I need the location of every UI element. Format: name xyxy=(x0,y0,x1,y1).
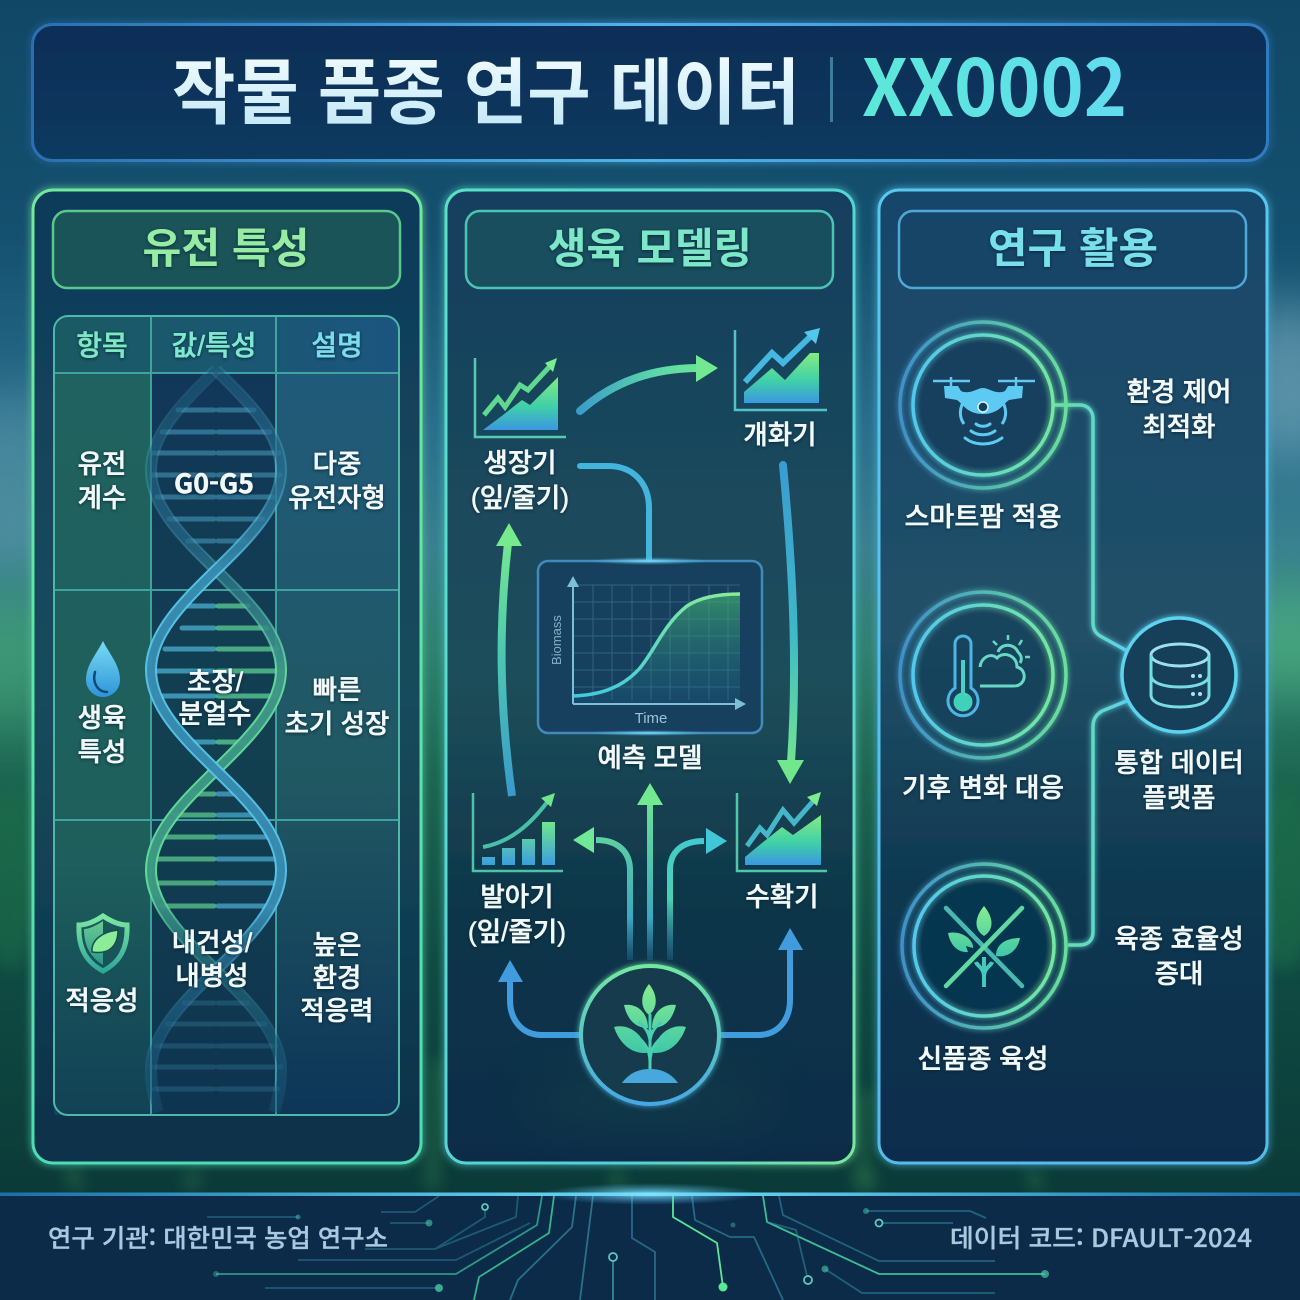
panel heading: growth modeling: 생육 모델링 xyxy=(548,225,752,272)
title banner xyxy=(32,24,1268,160)
dataset code: XX0002 xyxy=(862,27,1127,139)
label: data platform: 통합 데이터 xyxy=(1114,748,1244,778)
arrow: seed to harvest chart xyxy=(670,828,727,960)
note: environment control: 최적화 xyxy=(1142,412,1216,442)
row 3 description: 높은 xyxy=(313,930,361,960)
connector: breeding to data platform xyxy=(1068,700,1129,945)
stage label: sprouting: (잎/줄기) xyxy=(468,917,566,947)
arrow: seed to model xyxy=(637,783,663,960)
panel: genetic traits xyxy=(33,190,421,1163)
stage label: flowering: 개화기 xyxy=(743,420,817,450)
row 1 description: 유전자형 xyxy=(288,483,386,513)
label: new variety: 신품종 육성 xyxy=(918,1044,1048,1074)
stage label: harvest: 수확기 xyxy=(745,882,819,912)
panel heading: genetic traits xyxy=(53,211,400,288)
prediction model chart xyxy=(538,557,762,736)
table header: value: 값/특성 xyxy=(171,330,257,361)
row 2 description: 빠른 xyxy=(313,675,361,705)
arrow: vegetative label to model xyxy=(580,466,649,560)
stage label: vegetative: 생장기 xyxy=(483,448,557,478)
row 1 value: G0-G5 xyxy=(174,462,254,501)
chart icon: flowering stage xyxy=(735,328,827,410)
connector: smart farm to data platform xyxy=(1053,405,1129,652)
row 3 label: 적응성 xyxy=(65,986,139,1016)
arrow: sprouting to vegetative xyxy=(496,523,522,796)
row 3 value: 내건성/ xyxy=(172,928,252,958)
row 2 label: 특성 xyxy=(78,737,126,767)
connector: climate to data platform xyxy=(1066,673,1123,677)
circuit board traces xyxy=(207,1196,1045,1300)
stage label: sprouting: 발아기 xyxy=(480,882,554,912)
arrow: flowering to harvest xyxy=(777,465,804,784)
icon: water drop xyxy=(86,641,120,697)
trait table xyxy=(54,316,399,1115)
panel heading: genetic traits: 유전 특성 xyxy=(142,225,310,272)
chart icon: vegetative stage xyxy=(475,358,566,437)
icon: climate thermometer and cloud xyxy=(900,592,1066,758)
icon: smart farm drone xyxy=(900,322,1066,488)
note: breeding efficiency: 증대 xyxy=(1155,959,1203,989)
axis label: biomass: Biomass xyxy=(549,615,564,665)
arrow: seed to harvest label xyxy=(719,928,803,1035)
row 1 label: 유전 xyxy=(78,449,126,479)
arrow: seed to sprouting label xyxy=(498,960,581,1035)
note: breeding efficiency: 육종 효율성 xyxy=(1114,924,1244,954)
label: climate response: 기후 변화 대응 xyxy=(902,773,1064,803)
DNA double helix xyxy=(151,370,281,1112)
panel heading: growth modeling xyxy=(466,211,833,288)
row 2 description: 초기 성장 xyxy=(285,709,389,739)
label: data platform: 플랫폼 xyxy=(1142,783,1216,813)
row 2 label: 생육 xyxy=(78,703,126,733)
row 3 value: 내병성 xyxy=(175,961,249,991)
icon: leaf shield xyxy=(79,916,127,971)
panel heading: research applications: 연구 활용 xyxy=(988,225,1158,272)
panel haze xyxy=(520,1070,780,1130)
panel heading: research applications xyxy=(899,211,1246,288)
row 3 description: 적응력 xyxy=(300,996,374,1026)
table header: item: 항목 xyxy=(76,330,128,361)
note: environment control: 환경 제어 xyxy=(1127,377,1231,407)
row 1 label: 계수 xyxy=(78,483,126,513)
title divider xyxy=(830,57,833,122)
title text: 작물 품종 연구 데이터 xyxy=(172,54,800,134)
row 3 description: 환경 xyxy=(313,963,361,993)
icon: new variety breeding xyxy=(902,864,1066,1028)
axis label: time: Time xyxy=(635,710,667,727)
model caption: 예측 모델 xyxy=(598,743,702,773)
row 1 description: 다중 xyxy=(313,449,361,479)
panel: research applications xyxy=(879,190,1267,1163)
stage label: vegetative: (잎/줄기) xyxy=(471,483,569,513)
panel: growth modeling xyxy=(446,190,854,1163)
row 2 value: 초장/ xyxy=(187,667,243,697)
table header: description: 설명 xyxy=(311,330,363,361)
label: smart farm: 스마트팜 적용 xyxy=(904,502,1062,532)
footer: institute: 연구 기관: 대한민국 농업 연구소 xyxy=(48,1219,388,1255)
footer xyxy=(0,1183,1300,1300)
row 2 value: 분얼수 xyxy=(178,699,252,729)
chart icon: sprouting stage xyxy=(473,793,563,871)
icon: integrated database xyxy=(1122,618,1236,732)
arrow: vegetative to flowering xyxy=(580,355,718,411)
icon: seedling circle xyxy=(581,966,719,1104)
footer: data code: 데이터 코드: DFAULT-2024 xyxy=(950,1219,1252,1255)
arrow: seed to sprouting chart xyxy=(573,827,630,960)
chart icon: harvest stage xyxy=(737,792,827,871)
footer glow line xyxy=(0,1192,1300,1196)
